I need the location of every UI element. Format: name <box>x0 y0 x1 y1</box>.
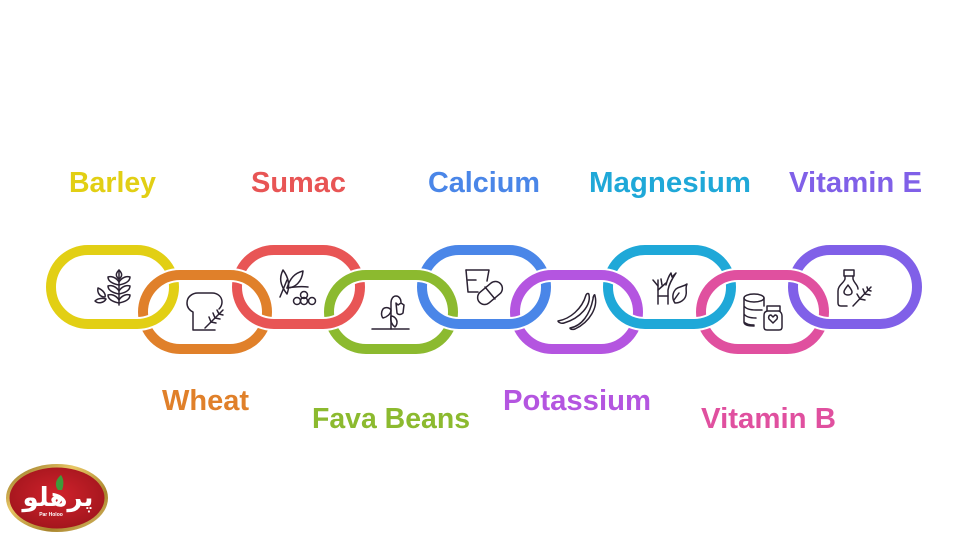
infographic canvas <box>6 171 922 532</box>
chain of interlocked links <box>51 250 917 349</box>
icon: magnesium plants <box>653 273 687 304</box>
logo small caption: Par Holoo <box>39 512 63 518</box>
lower links upper arcs passing over <box>140 268 827 300</box>
label: Calcium: Calcium <box>428 167 540 199</box>
icon: potassium pods <box>558 294 596 329</box>
icon: sumac leaves and berries <box>280 270 316 304</box>
icon: calcium beaker and pill <box>466 270 505 307</box>
logo green leaf <box>56 475 63 490</box>
label: Potassium: Potassium <box>503 385 651 417</box>
lower links base layer <box>143 275 824 349</box>
logo red badge <box>10 468 104 528</box>
label: Vitamin B: Vitamin B <box>701 403 836 435</box>
icon: wilted fava plant <box>372 296 409 329</box>
icon: vitamin E oil bottle and sprig <box>838 270 871 306</box>
label: Vitamin E: Vitamin E <box>789 167 922 199</box>
label: Fava Beans: Fava Beans <box>312 403 470 435</box>
label: Wheat: Wheat <box>162 385 249 417</box>
logo gold ring <box>6 464 108 532</box>
icon: barley <box>95 270 130 305</box>
logo <box>6 464 108 532</box>
label: Sumac: Sumac <box>251 167 346 199</box>
label: Magnesium: Magnesium <box>589 167 751 199</box>
logo wordmark: پرهلو <box>21 483 93 513</box>
icon: vitamin B coins and jar <box>744 294 782 330</box>
upper links <box>51 250 917 324</box>
label: Barley: Barley <box>69 167 156 199</box>
icon: bread with sprig <box>187 293 223 330</box>
